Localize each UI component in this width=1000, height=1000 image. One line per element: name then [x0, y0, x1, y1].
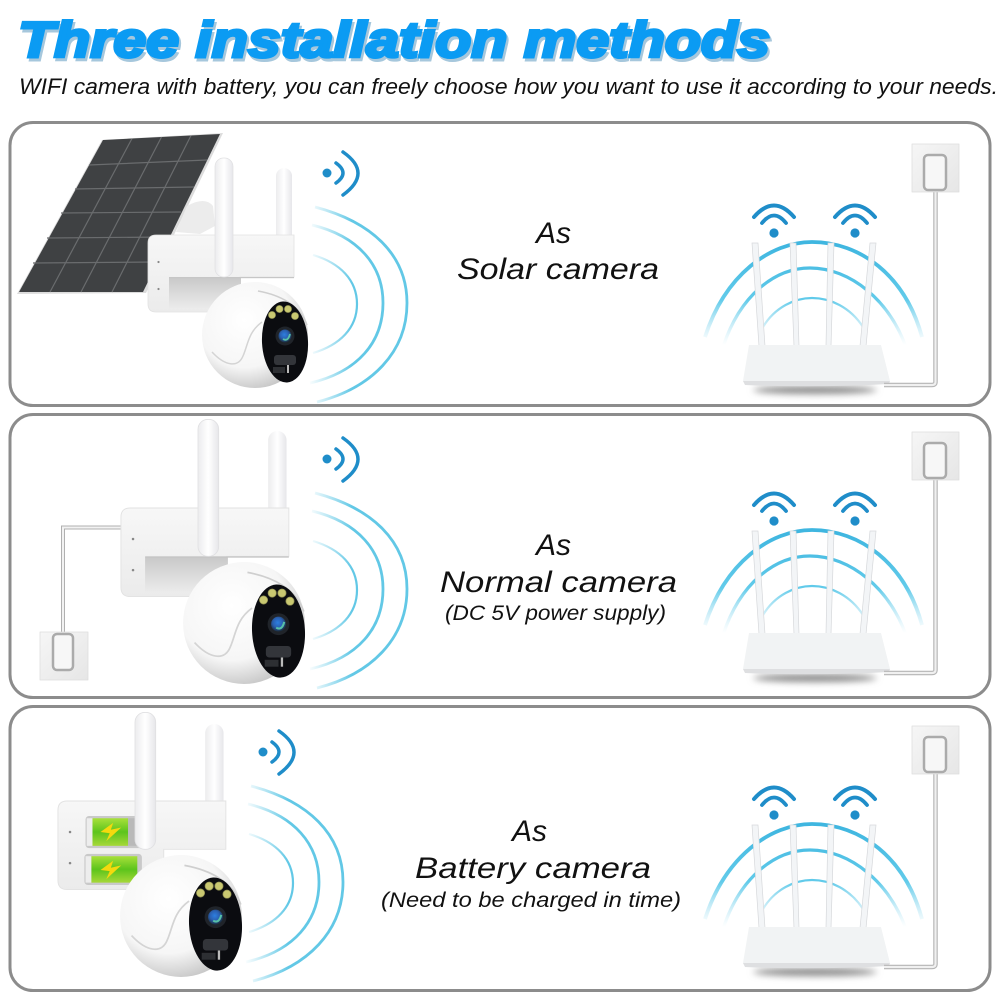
label: solar camera	[457, 217, 659, 286]
label: normal camera: As	[534, 529, 571, 562]
router with wall socket	[705, 144, 959, 394]
label: battery camera: Battery camera	[415, 852, 651, 885]
signal waves	[310, 207, 407, 402]
label: normal camera: Normal camera	[440, 566, 677, 599]
panel: normal camera	[10, 414, 990, 698]
label: battery camera	[381, 815, 681, 912]
title: Three installation methods	[18, 12, 770, 68]
battery camera	[58, 712, 244, 977]
router with wall socket	[705, 726, 959, 976]
panel: solar camera	[10, 122, 990, 406]
label: solar camera: Solar camera	[457, 253, 659, 286]
wifi signal icon	[258, 731, 294, 774]
label: solar camera: As	[534, 217, 571, 250]
label: battery camera: As	[510, 815, 547, 848]
signal waves	[246, 786, 343, 981]
solar mount bracket	[176, 201, 215, 234]
label: normal camera	[440, 529, 677, 625]
wifi signal icon	[322, 438, 358, 481]
router with wall socket	[705, 432, 959, 682]
wall socket and cable	[40, 528, 122, 680]
signal waves	[310, 493, 407, 688]
title: Three installation methods	[20, 15, 772, 71]
label: battery camera: (Need to be charged in time)	[381, 889, 681, 912]
wifi signal icon	[322, 152, 358, 195]
normal camera	[121, 419, 307, 684]
label: normal camera: (DC 5V power supply)	[445, 602, 666, 625]
solar panel	[17, 133, 223, 294]
solar camera	[148, 158, 310, 388]
subtitle: WIFI camera with battery, you can freely choose how you want to use it according to your needs.	[19, 74, 998, 99]
panel: battery camera	[10, 706, 990, 990]
